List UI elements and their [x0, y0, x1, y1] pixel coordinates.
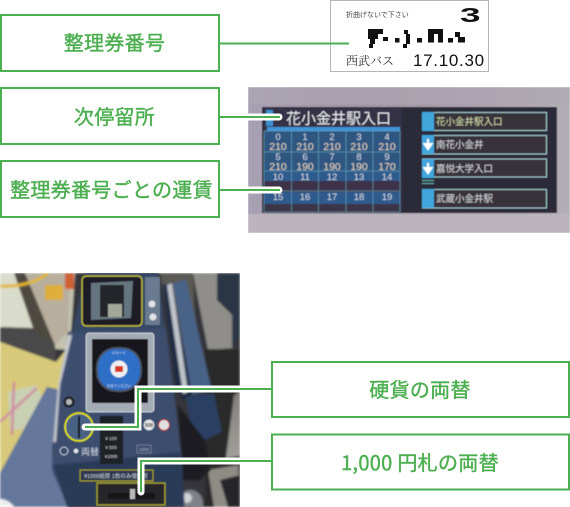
fare table numbers: 170: [378, 161, 396, 173]
fare table numbers: 190: [296, 161, 314, 173]
label: fare by ticket number: [1, 161, 219, 217]
change instruction area: 両替: [81, 446, 99, 457]
connector: next stop: [220, 114, 280, 120]
photo: fare box on bus: [0, 273, 240, 507]
fare table numbers: 9: [384, 152, 390, 163]
fare table numbers: 12: [327, 172, 337, 183]
banknote slot: [80, 470, 165, 505]
fare table numbers: 3: [356, 132, 362, 143]
fare table numbers: 17: [327, 192, 337, 203]
fare table numbers: 5: [275, 152, 281, 163]
fare table numbers: 1: [302, 132, 308, 143]
fare table numbers: 190: [323, 161, 341, 173]
fare table numbers: 210: [378, 141, 396, 153]
fare table numbers: 210: [296, 141, 314, 153]
fare table numbers: 210: [269, 141, 287, 153]
label: next stop: 次停留所: [74, 106, 155, 129]
upcoming stops list: [422, 112, 546, 208]
photo: numbered ticket: 折曲げないで下さい: [346, 10, 409, 19]
label: 1,000 yen note change: [272, 434, 569, 490]
fare table numbers: 16: [300, 192, 310, 203]
fare table numbers: 210: [269, 161, 287, 173]
photo: numbered ticket: 3: [460, 5, 481, 27]
fare table numbers: 10: [273, 172, 283, 183]
label: seiri-ken number: 整理券番号: [64, 32, 165, 55]
photo: numbered ticket: [330, 0, 488, 72]
connector: coin change: [85, 389, 271, 427]
fare table numbers: 190: [350, 161, 368, 173]
upcoming stops list: 南花小金井: [436, 139, 484, 151]
photo: bus fare display: [248, 87, 570, 233]
change instruction area: ¥1000: [105, 454, 118, 459]
IC card reader: おあてください: [107, 383, 132, 388]
upcoming stops list: 武蔵小金井駅: [436, 193, 494, 205]
label: coin change: [272, 362, 569, 417]
fare table numbers: 210: [350, 141, 368, 153]
label: fare by ticket number: 整理券番号ごとの運賃: [10, 179, 213, 202]
ticket barcode pattern: [368, 29, 465, 48]
change instruction area: 500: [145, 423, 153, 429]
IC card reader: [86, 333, 154, 412]
fare table numbers: 210: [323, 141, 341, 153]
coin change slot: [64, 396, 93, 441]
label: next stop: [1, 88, 219, 144]
change instruction area: ¥ 100: [105, 436, 117, 441]
label: seiri-ken number: [1, 15, 219, 71]
banknote slot: ¥1000紙幣 1枚のみ使用可: [84, 472, 148, 480]
fare box body: [52, 273, 184, 507]
connector: ticket number: [220, 42, 349, 44]
fare table numbers: 11: [300, 172, 310, 183]
fare table numbers: 0: [275, 132, 281, 143]
label: 1,000 yen note change: 1,000 円札の両替: [341, 447, 499, 476]
connector: fare by number: [220, 186, 280, 194]
next stop name: 花小金井駅入口: [286, 110, 391, 128]
fare table numbers: 6: [302, 152, 308, 163]
upcoming stops list: 嘉悦大学入口: [436, 163, 493, 175]
fare table numbers: [269, 132, 396, 203]
fare table numbers: 18: [354, 192, 364, 203]
fare table numbers: 14: [382, 172, 392, 183]
fare table numbers: 15: [273, 192, 283, 203]
change instruction area: [60, 416, 170, 464]
change instruction area: ¥ 500: [105, 445, 117, 450]
fare table numbers: 8: [356, 152, 362, 163]
change instruction area: 1000: [139, 447, 150, 452]
upcoming stops list: 花小金井駅入口: [436, 116, 503, 128]
fare table numbers: 4: [384, 132, 390, 143]
fare display left panel: [264, 108, 402, 212]
connector: banknote change: [141, 461, 271, 492]
coin and ticket slot top: [82, 276, 160, 326]
fare table numbers: 13: [354, 172, 364, 183]
photo: numbered ticket: 17.10.30: [413, 51, 485, 70]
IC card reader: ICカード: [112, 350, 126, 355]
fare table numbers: 7: [329, 152, 335, 163]
photo: numbered ticket: 西武バス: [346, 53, 394, 68]
handrail arm: [163, 279, 222, 480]
fare table numbers: 19: [382, 192, 392, 203]
fare table numbers: 2: [329, 132, 335, 143]
photo background scene: [0, 273, 240, 507]
label: coin change: 硬貨の両替: [369, 379, 471, 402]
